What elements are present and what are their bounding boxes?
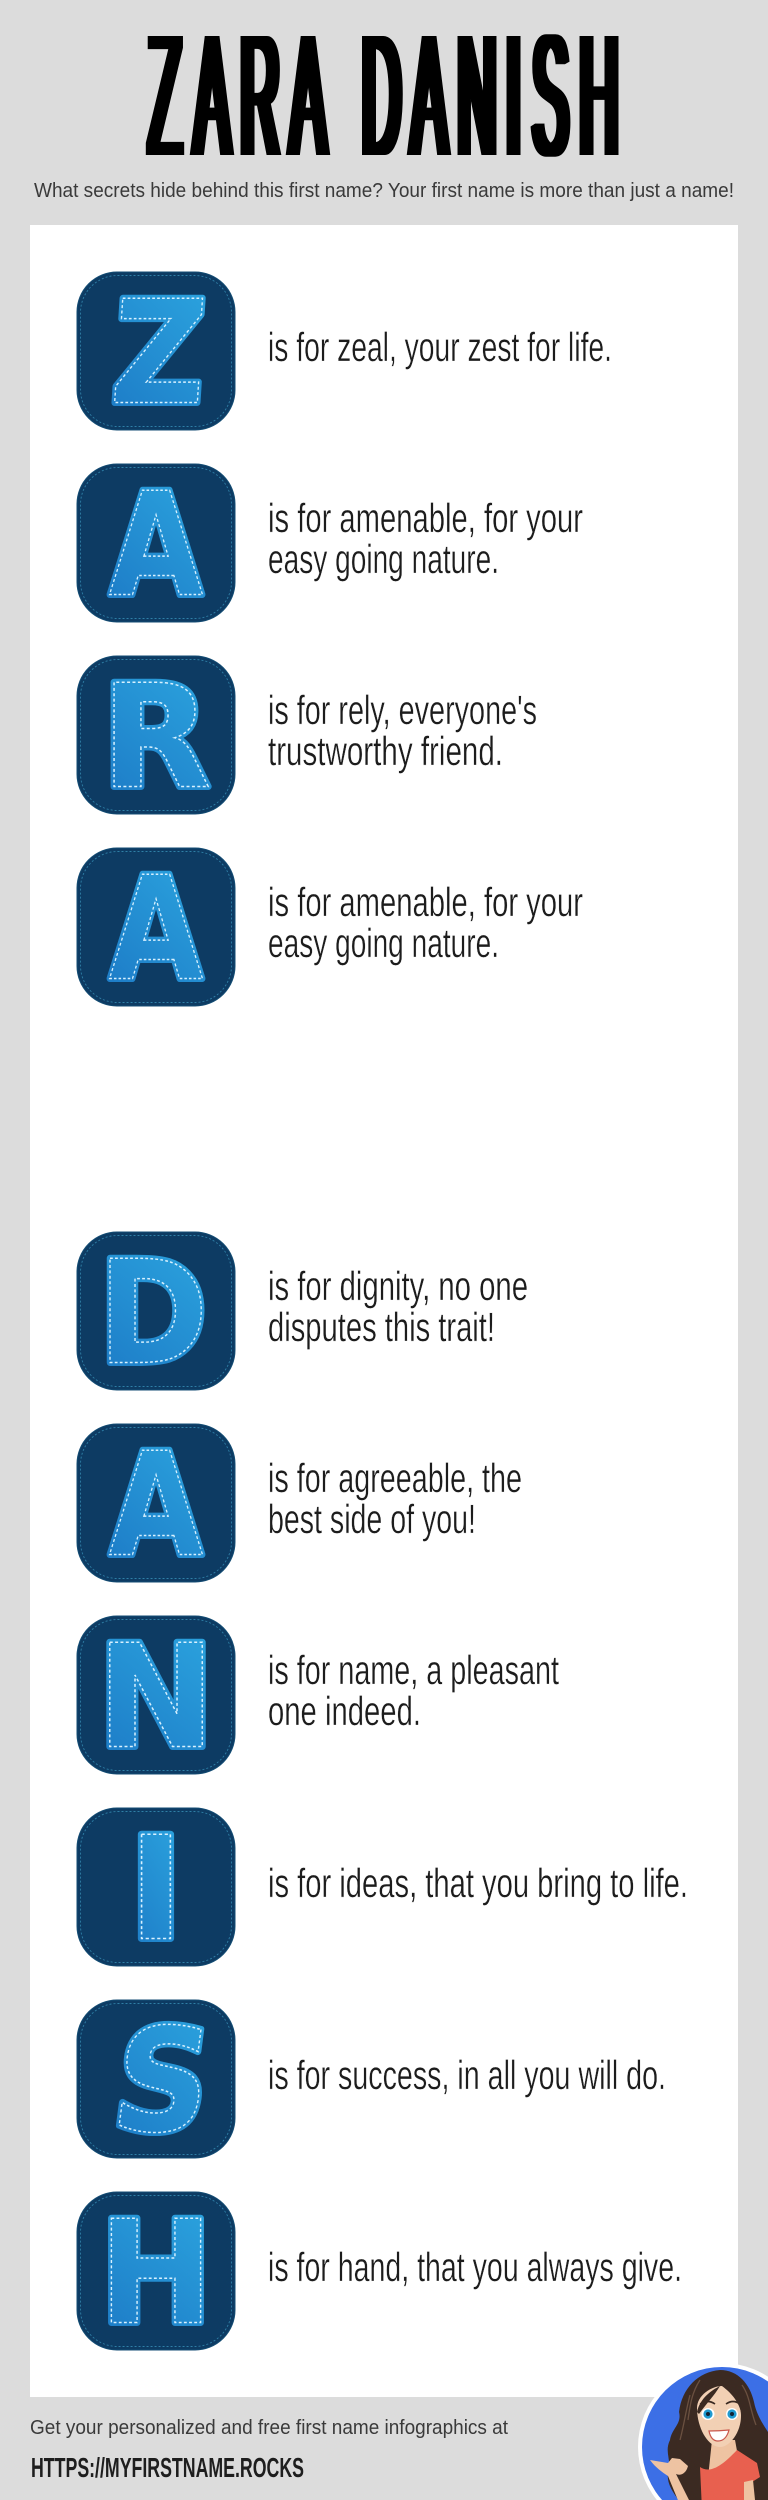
icon: letter N: N xyxy=(97,1614,215,1781)
text: A meaning: best side of you! xyxy=(268,1496,476,1542)
text: Z meaning: is for zeal, your zest for life. xyxy=(268,324,612,370)
text: A meaning: is for amenable, for your xyxy=(268,879,583,925)
row: N xyxy=(77,1614,559,1781)
text: N meaning: is for name, a pleasant xyxy=(268,1647,559,1693)
icon: letter R: R xyxy=(101,654,211,820)
icon: letter D: D xyxy=(98,1230,208,1397)
text: A meaning xyxy=(268,879,583,966)
text: R meaning: is for rely, everyone's xyxy=(268,687,537,733)
footer text: Get your personalized and free first name infographics at xyxy=(30,2417,508,2439)
icon: letter S: S xyxy=(104,1998,221,2165)
text: A meaning xyxy=(268,1455,522,1542)
text: N meaning xyxy=(268,1647,559,1734)
row: H xyxy=(77,2190,682,2356)
row: S xyxy=(77,1998,666,2165)
row: Z xyxy=(77,271,612,437)
icon: letter N: N xyxy=(97,1614,215,1781)
icon: letter Z: Z xyxy=(107,271,212,437)
icon: letter D: D xyxy=(98,1230,208,1397)
text: R meaning: trustworthy friend. xyxy=(268,728,503,774)
icon: letter A xyxy=(77,847,235,1013)
text: R meaning xyxy=(268,687,537,774)
icon: letter D xyxy=(77,1230,235,1397)
footer url: HTTPS://MYFIRSTNAME.ROCKS xyxy=(31,2452,304,2483)
text: D meaning: disputes this trait! xyxy=(268,1304,495,1350)
icon: letter A: A xyxy=(109,1423,203,1589)
row: I xyxy=(77,1806,688,1972)
icon: letter S: S xyxy=(104,1998,221,2165)
row: D xyxy=(77,1230,528,1397)
text: A meaning: is for amenable, for your xyxy=(268,495,583,541)
text: D meaning: is for dignity, no one xyxy=(268,1263,528,1309)
text: A meaning: easy going nature. xyxy=(268,536,499,582)
row: R xyxy=(77,654,537,820)
subtitle: What secrets hide behind this first name? Your first name is more than just a name! xyxy=(34,180,734,202)
icon: letter A xyxy=(77,1423,235,1589)
icon: avatar woman xyxy=(638,2363,768,2500)
icon: letter I: I xyxy=(128,1806,184,1972)
text: D meaning xyxy=(268,1263,528,1350)
icon: letter A: A xyxy=(109,463,203,629)
icon: letter Z: Z xyxy=(107,271,212,437)
text: N meaning: one indeed. xyxy=(268,1688,421,1734)
icon: letter A: A xyxy=(109,1423,203,1589)
icon: letter R xyxy=(77,654,235,820)
icon: letter I: I xyxy=(128,1806,184,1972)
icon: letter I xyxy=(77,1806,235,1972)
text: A meaning xyxy=(268,495,583,582)
icon: letter A: A xyxy=(109,847,203,1013)
icon: letter A: A xyxy=(109,847,203,1013)
title: ZARA DANISH xyxy=(149,0,618,193)
icon: letter A xyxy=(77,463,235,629)
icon: letter A: A xyxy=(109,463,203,629)
row: A xyxy=(77,463,583,629)
row: A second xyxy=(77,847,583,1013)
icon: letter H: H xyxy=(99,2190,213,2356)
text: A meaning: easy going nature. xyxy=(268,920,499,966)
icon: letter R: R xyxy=(101,654,211,820)
row: A third xyxy=(77,1423,522,1589)
text: A meaning: is for agreeable, the xyxy=(268,1455,522,1501)
icon: letter Z xyxy=(77,271,235,437)
icon: letter H: H xyxy=(99,2190,213,2356)
